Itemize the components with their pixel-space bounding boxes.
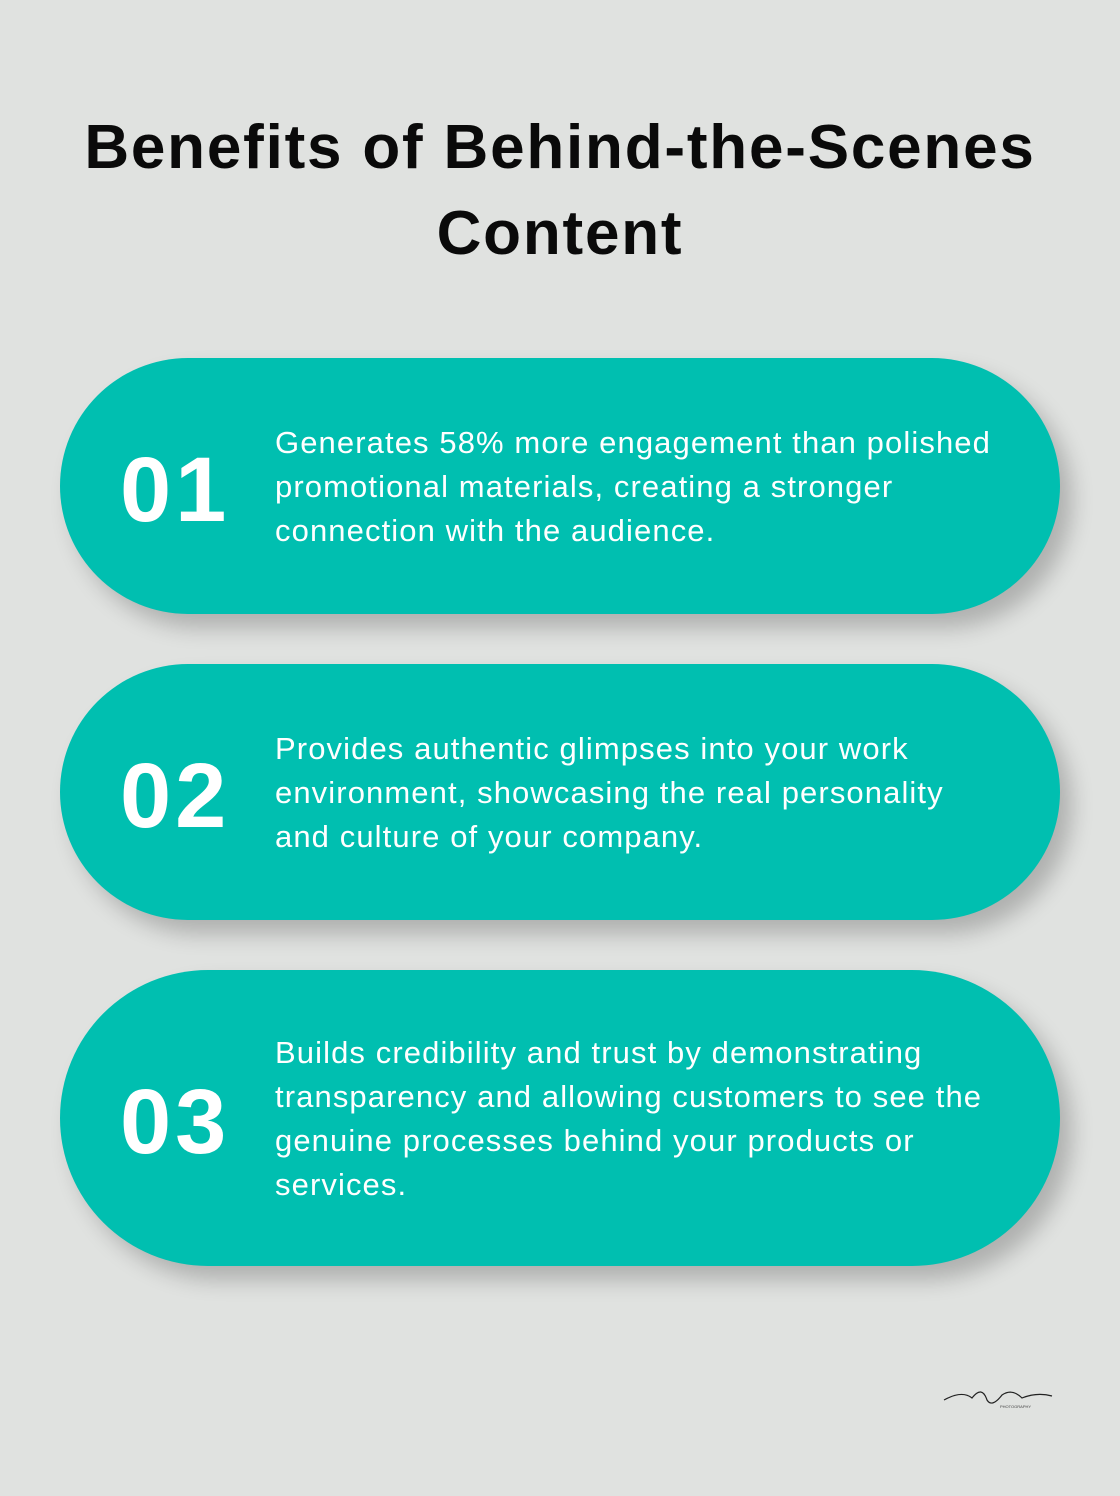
card 1: [60, 358, 1060, 614]
logo signature: [944, 1391, 1052, 1409]
text 2: [275, 731, 944, 854]
text 3: services.: [275, 1167, 407, 1202]
title: [84, 113, 1036, 268]
card 3: [60, 970, 1060, 1266]
text 3: transparency and allowing customers to see the: [275, 1079, 982, 1114]
text 2: environment, showcasing the real personality: [275, 775, 944, 810]
text 1: connection with the audience.: [275, 513, 715, 548]
text 2: and culture of your company.: [275, 819, 703, 854]
text 1: [275, 425, 991, 548]
text 1: promotional materials, creating a stronger: [275, 469, 893, 504]
title: Benefits of Behind-the-Scenes: [84, 113, 1036, 182]
card 2: [60, 664, 1060, 920]
text 3: [275, 1035, 982, 1202]
logo signature: PHOTOGRAPHY: [1000, 1404, 1031, 1409]
text 1: Generates 58% more engagement than polished: [275, 425, 991, 460]
number 03: 03: [120, 1071, 230, 1173]
text 3: genuine processes behind your products or: [275, 1123, 915, 1158]
number 01: 01: [120, 439, 230, 541]
number 02: 02: [120, 745, 230, 847]
text 2: Provides authentic glimpses into your work: [275, 731, 909, 766]
title: Content: [437, 199, 683, 268]
text 3: Builds credibility and trust by demonstrating: [275, 1035, 922, 1070]
